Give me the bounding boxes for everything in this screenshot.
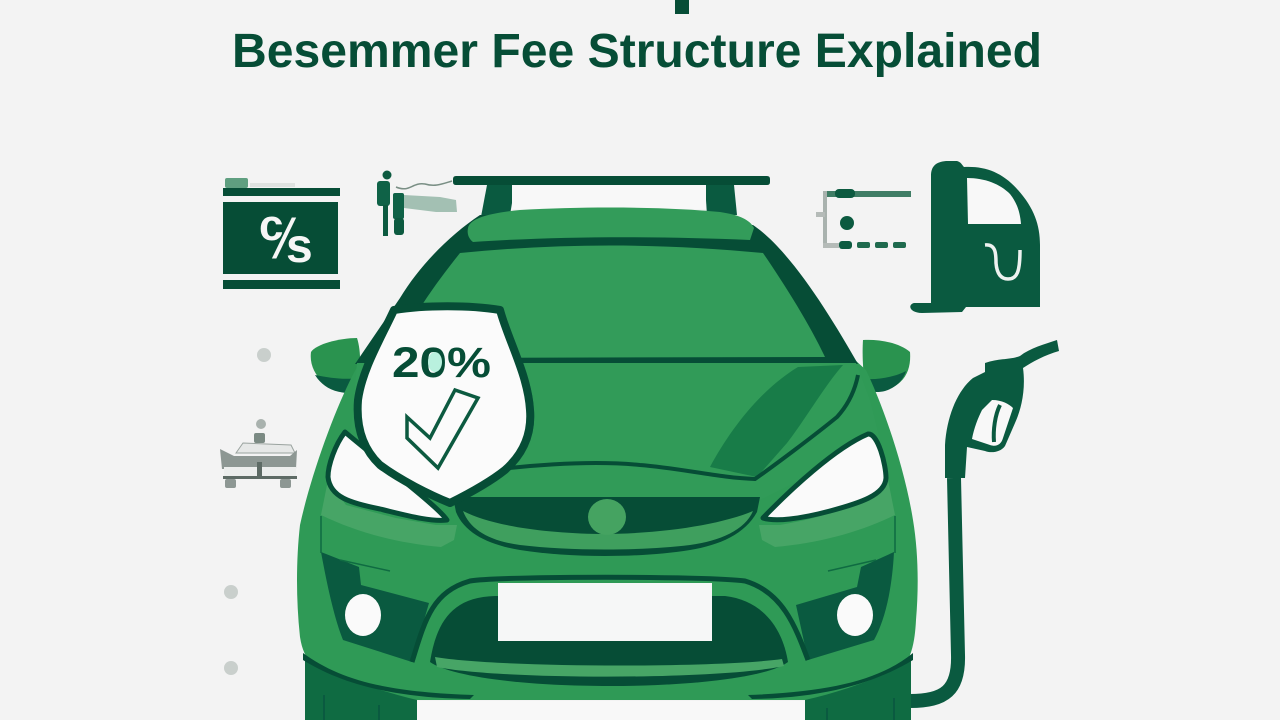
icon: small schematic bbox=[816, 189, 911, 249]
check mark bbox=[407, 390, 478, 468]
cropped heading remnant bbox=[675, 0, 689, 14]
fee card symbol: s bbox=[286, 220, 313, 273]
license plate bbox=[498, 583, 712, 641]
fee card symbol: / bbox=[269, 208, 299, 270]
left fog light housing bbox=[321, 516, 429, 662]
title: Besemmer Fee Structure Explained bbox=[232, 25, 1042, 78]
zero fill bbox=[428, 352, 442, 372]
right fog light bbox=[837, 594, 873, 636]
car bbox=[297, 176, 918, 720]
bumper highlights bbox=[321, 480, 457, 547]
windshield bbox=[380, 246, 825, 358]
bumper lower lines bbox=[303, 653, 913, 699]
fee card symbol: c bbox=[259, 201, 283, 250]
tyres bbox=[305, 660, 911, 720]
icon: fee card bbox=[223, 178, 340, 289]
left fog light bbox=[345, 594, 381, 636]
right headlight bbox=[763, 434, 886, 520]
grille bbox=[453, 497, 760, 556]
gap below bumper bbox=[417, 701, 805, 720]
left headlight bbox=[328, 432, 447, 520]
right fog light housing bbox=[796, 516, 895, 660]
grille badge bbox=[588, 499, 626, 535]
hood shut line bbox=[455, 375, 858, 479]
roof rack bbox=[453, 176, 770, 222]
roof frame bbox=[355, 215, 858, 364]
icon: fuel nozzle and hose bbox=[910, 340, 1059, 701]
fee card symbol bbox=[259, 201, 313, 273]
hood stripe bbox=[710, 365, 843, 477]
icon: small car bbox=[220, 419, 297, 488]
icon: people and cable bbox=[377, 170, 457, 236]
lower intake bbox=[412, 577, 808, 686]
car body bbox=[297, 300, 918, 700]
shield badge bbox=[358, 306, 534, 503]
side mirrors bbox=[311, 338, 910, 393]
grey bullet dots bbox=[224, 348, 271, 675]
icon: fuel pump bbox=[910, 161, 1040, 313]
shield percentage: 20% bbox=[392, 339, 491, 387]
hood bbox=[350, 363, 880, 500]
roof panel bbox=[468, 208, 754, 242]
